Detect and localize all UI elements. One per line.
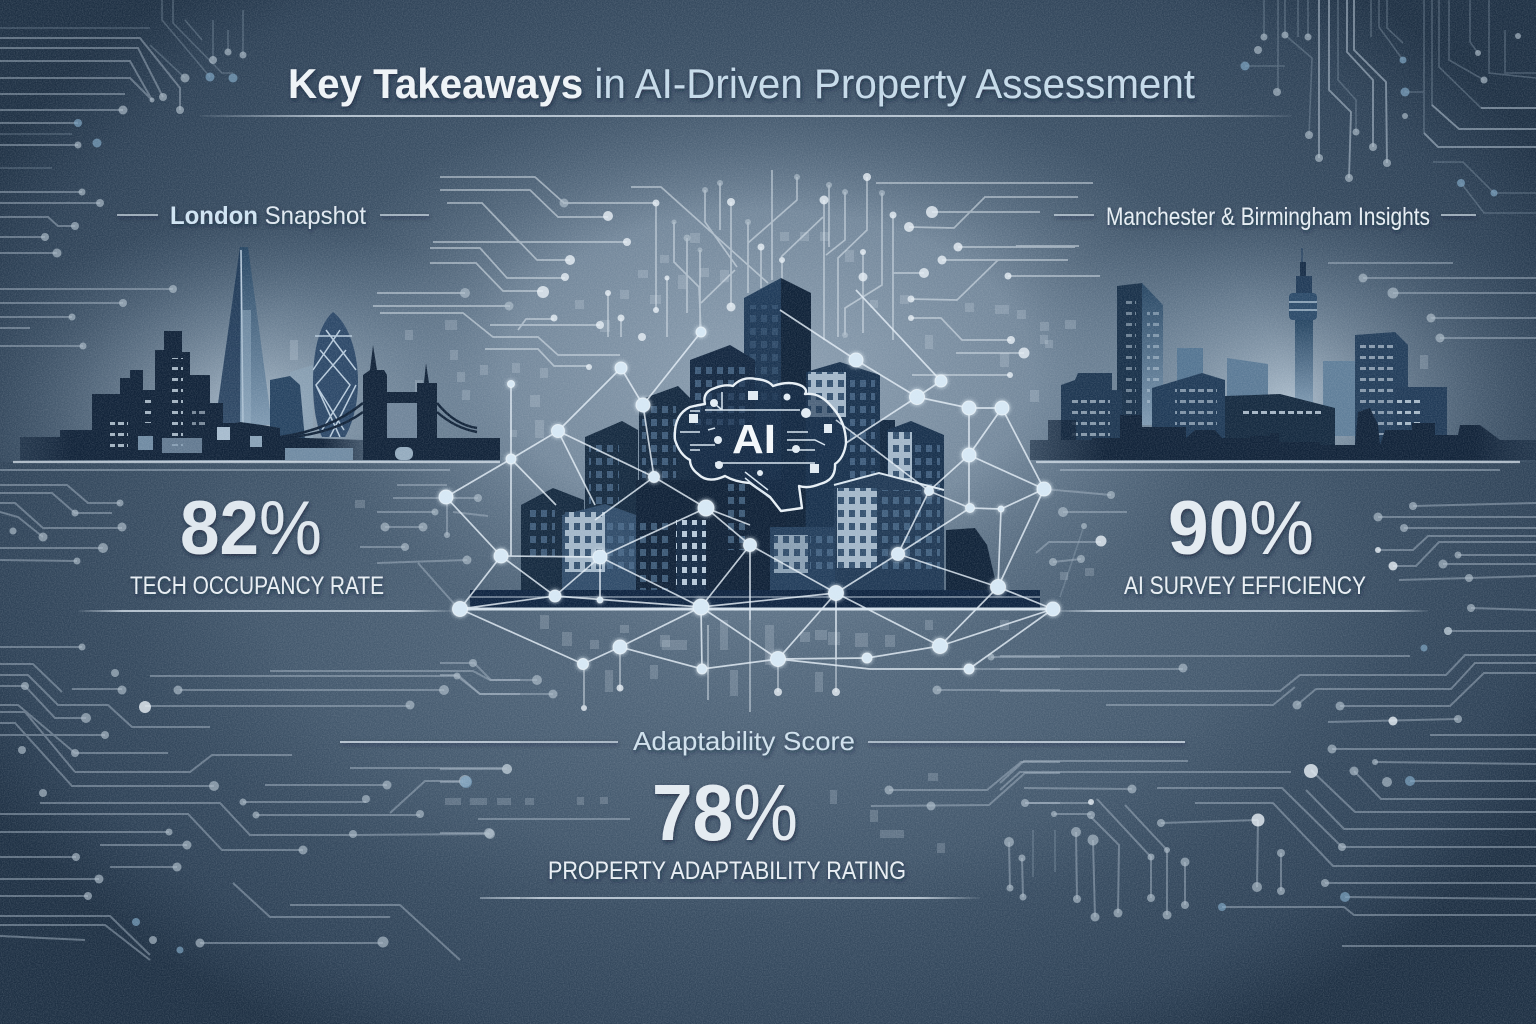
city silhouette [20,331,363,460]
data squares [240,232,1428,853]
stat: 78% property adaptability: PROPERTY ADAPTABILITY RATING [548,857,906,885]
stat: 90% AI survey efficiency [1124,486,1366,600]
Shard [215,247,272,425]
right light tower [806,362,880,530]
network mesh [439,290,1060,674]
low centre block [770,527,835,605]
circuit lines: bottom left [0,644,520,960]
circuit lines: top right [1240,0,1536,342]
Manchester ground lines [1036,461,1520,463]
right front block [834,473,944,600]
London ground lines [13,461,500,463]
tall tower [1117,283,1163,425]
circuit lines: middle left [0,485,488,607]
light block left [562,504,636,600]
title: Key Takeaways in AI-Driven Property Assessment [288,60,1195,107]
tower 2 [690,345,755,600]
heading: Manchester and Birmingham Insights: Manchester & Birmingham Insights [1106,203,1430,231]
stat: 82% tech occupancy [130,486,384,600]
tower 5 [521,488,584,600]
right offices [1355,332,1408,445]
central dark [636,480,786,605]
central city [470,278,1040,608]
tower 3 [639,386,690,600]
Tower Bridge [280,345,500,460]
stat: 78% property adaptability: 78% [652,768,798,857]
tallest tower [744,278,811,600]
circuit lines: upper centre right [876,183,1100,378]
background towers [290,365,313,440]
tall right dark [805,420,895,600]
circuit lines: bottom right [1000,627,1536,946]
divider left [78,610,453,612]
AI label: AI [732,416,776,462]
heading: Adaptability Score: Adaptability Score [633,726,855,756]
heading: London Snapshot: London Snapshot [170,202,366,230]
Gherkin [313,312,358,437]
city base [470,590,1040,608]
circuit lines: vertical traces above the city [605,170,929,341]
stat: 90% AI survey efficiency: 90% [1168,486,1314,571]
far right tower [887,421,944,600]
broadcasting tower [1289,248,1317,405]
right low block [946,528,1000,600]
brain icon with AI [675,378,846,511]
rule under rating [480,897,980,899]
windows [170,358,183,446]
circuit lines: under the network [440,620,1060,838]
circuit lines: upper centre left [373,177,660,370]
London skyline [0,247,500,470]
tower 4 [585,421,638,600]
title underline [200,115,1291,117]
middle blocks [1152,373,1225,440]
foreground silhouette [1030,408,1536,460]
stat: 78% property adaptability [548,768,906,885]
stat: 82% tech occupancy: TECH OCCUPANCY RATE [130,572,384,600]
Manchester and Birmingham skyline [1030,248,1536,470]
left block [1061,373,1122,440]
circuit lines: middle right [1036,489,1536,635]
divider right [1053,610,1428,612]
circuit lines: top left [0,0,246,350]
stat: 82% tech occupancy: 82% [180,486,322,571]
stat: 90% AI survey efficiency: AI SURVEY EFFICIENCY [1124,572,1366,600]
